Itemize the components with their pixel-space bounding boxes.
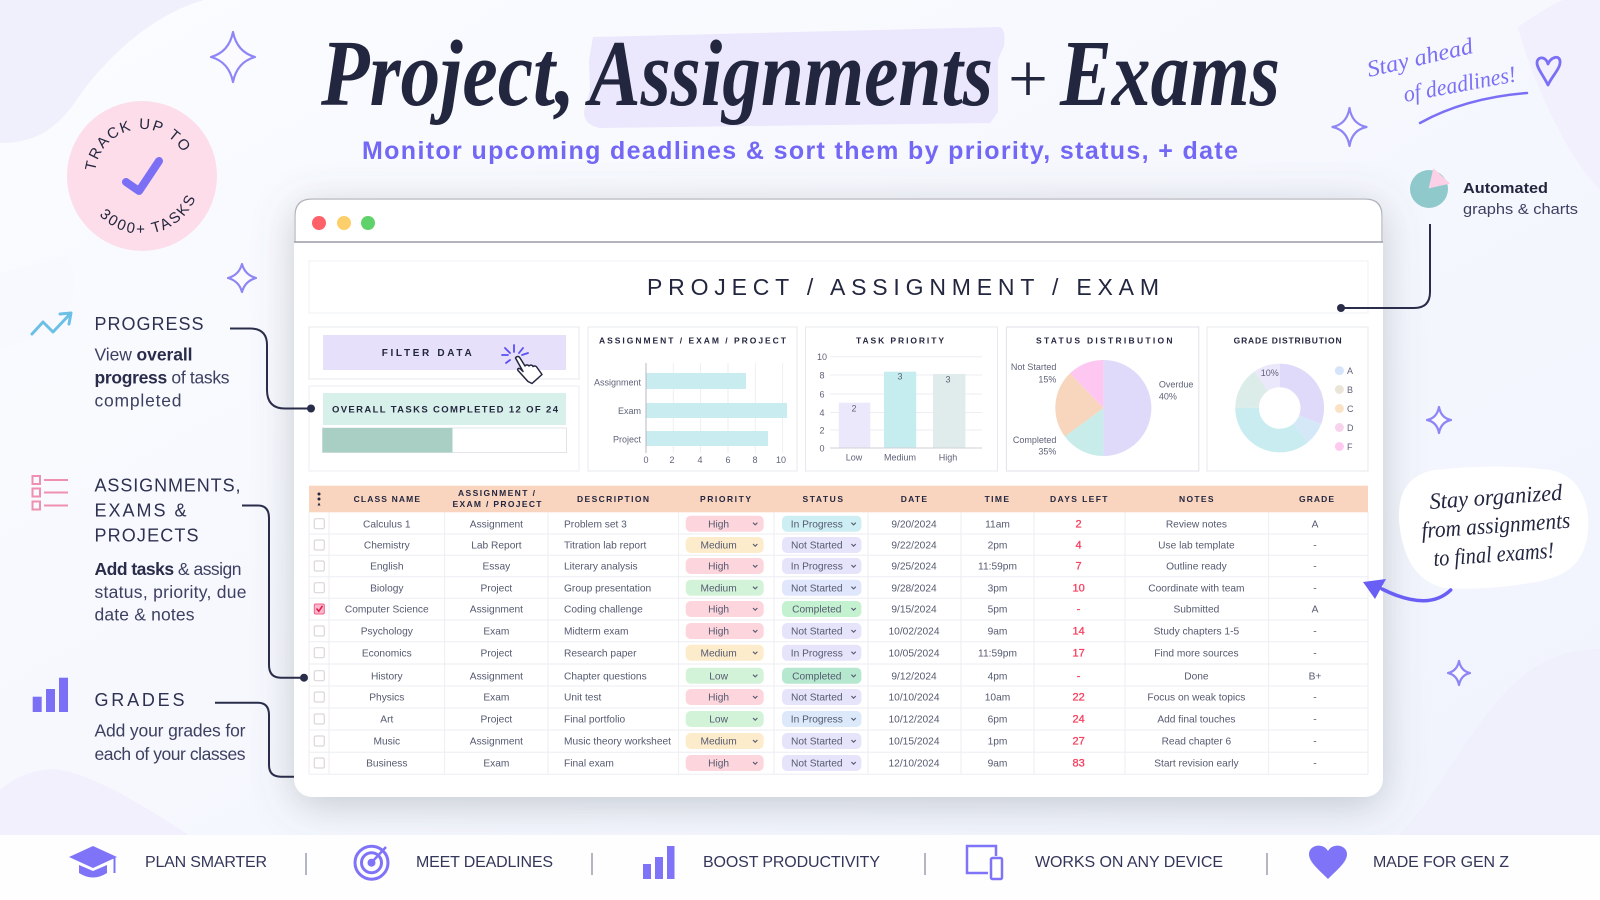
- table row: Calculus 1: 2: [1076, 518, 1082, 530]
- note: stay ahead of deadlines: Stay ahead: [1365, 33, 1476, 82]
- table row: Computer Science: Assignment: [470, 605, 523, 616]
- bar chart: assignment exam project: 2: [669, 455, 675, 465]
- table row: Economics: Economics: [362, 648, 412, 659]
- pie chart: status distribution: Not Started: [1011, 362, 1056, 372]
- table header: DATE: [901, 494, 927, 504]
- table row: Art: 6pm: [988, 715, 1007, 726]
- table row: Psychology: Exam: [483, 627, 509, 638]
- bar chart: task priority: 6: [819, 390, 825, 400]
- icon: bar chart: [33, 678, 68, 712]
- bar chart: assignment exam project: ASSIGNMENT / EXAM / PROJECT: [599, 336, 787, 346]
- chart legend: F: [1347, 442, 1353, 452]
- table row: Biology: [314, 580, 1317, 596]
- title: Assignments: [585, 22, 993, 126]
- note: stay ahead of deadlines: of deadlines!: [1401, 62, 1518, 107]
- table row: Chemistry: -: [1313, 541, 1317, 552]
- chart legend: B: [1347, 385, 1353, 395]
- table row: Computer Science: Coding challenge: [564, 605, 643, 616]
- panel: filter data: [309, 327, 579, 384]
- bar chart: assignment exam project: Assignment: [594, 378, 641, 388]
- table row: Biology: Not Started: [791, 583, 843, 594]
- table row: Physics: Not Started: [791, 693, 843, 704]
- callout: automated graphs: graphs & charts: [1463, 201, 1578, 218]
- table row: Physics: Physics: [369, 693, 404, 704]
- bar chart: assignment exam project: 0: [643, 455, 649, 465]
- table row: Calculus 1: Review notes: [1166, 519, 1227, 530]
- table row: Chemistry: Medium: [700, 541, 737, 552]
- table header: NOTES: [1179, 494, 1214, 504]
- table row: Economics: Research paper: [564, 648, 637, 659]
- table row: Economics: 11:59pm: [978, 648, 1017, 659]
- table row: Chemistry: 4: [1076, 540, 1082, 552]
- panel: progress: [32, 313, 230, 411]
- table row: Business: -: [1313, 759, 1317, 770]
- footer bar: MADE FOR GEN Z: [1373, 854, 1509, 871]
- table row: Biology: 3pm: [988, 583, 1007, 594]
- panel: assignments, exams and projects: status, priority, due: [94, 582, 246, 602]
- table row: Psychology: [314, 623, 1317, 639]
- table row: Psychology: -: [1313, 627, 1317, 638]
- table row: Business: High: [708, 759, 729, 770]
- badge: track up to 3000+ tasks: [67, 101, 217, 251]
- table row: Economics: In Progress: [791, 648, 843, 659]
- pie chart: status distribution: Overdue: [1159, 380, 1193, 390]
- progress bar: [322, 428, 566, 452]
- table row: Chemistry: Chemistry: [364, 541, 411, 552]
- table row: Computer Science: A: [1312, 605, 1319, 616]
- footer bar: PLAN SMARTER: [145, 854, 267, 871]
- bar chart: task priority: Low: [846, 452, 863, 462]
- donut chart: grade distribution: GRADE DISTRIBUTION: [1234, 336, 1342, 346]
- bar chart: assignment exam project: Project: [613, 434, 641, 444]
- table row: Biology: Biology: [370, 583, 404, 594]
- table row: Computer Science: Submitted: [1173, 605, 1220, 616]
- table row: English: Outline ready: [1166, 562, 1228, 573]
- table row: Computer Science: 9/15/2024: [891, 605, 937, 616]
- table row: Economics: [314, 645, 1317, 661]
- table header: DESCRIPTION: [577, 494, 649, 504]
- panel: progress: progress of tasks: [94, 367, 230, 387]
- bar chart: task priority: 4: [819, 408, 825, 418]
- icon: pie chart: [1410, 170, 1448, 208]
- table row: Psychology: 9am: [988, 627, 1007, 638]
- table row: Computer Science: -: [1077, 604, 1081, 616]
- table row: Music: Assignment: [470, 737, 523, 748]
- table row: Business: [314, 755, 1317, 771]
- table row: Calculus 1: A: [1312, 519, 1319, 530]
- callout: stay organized: from assignments: [1421, 508, 1571, 543]
- pie chart: status distribution: 35%: [1038, 446, 1056, 456]
- icon: checklist: [32, 476, 68, 510]
- table row: Economics: -: [1313, 648, 1317, 659]
- table row: Music: Medium: [700, 737, 737, 748]
- table row: Biology: Group presentation: [564, 583, 651, 594]
- table row: Chemistry: Lab Report: [471, 541, 522, 552]
- table row: History: 4pm: [988, 671, 1007, 682]
- table row: Business: Not Started: [791, 759, 843, 770]
- table row: Music: Music theory worksheet: [564, 737, 671, 748]
- table row: History: Chapter questions: [564, 671, 647, 682]
- pie chart: status distribution: Completed: [1013, 435, 1056, 445]
- table row: Music: Music: [373, 737, 400, 748]
- bar chart: task priority: 0: [819, 444, 825, 454]
- icon: target: [355, 846, 388, 879]
- table row: Business: Final exam: [564, 759, 614, 770]
- icon: check mark: [126, 161, 159, 191]
- table row: Psychology: Psychology: [361, 627, 414, 638]
- table row: Calculus 1: 11am: [985, 519, 1010, 530]
- badge: track up to 3000+ tasks: TRACK UP TO: [84, 118, 190, 169]
- bar chart: task priority: [806, 327, 998, 471]
- chart legend: C: [1347, 404, 1354, 414]
- callout: automated graphs: Automated: [1463, 180, 1548, 197]
- table header: TIME: [985, 494, 1009, 504]
- table row: Economics: Find more sources: [1154, 648, 1239, 659]
- table row: Business: 9am: [988, 759, 1007, 770]
- sheet title: [309, 261, 1368, 313]
- pie chart: status distribution: 15%: [1038, 374, 1056, 384]
- bar chart: assignment exam project: [588, 327, 797, 471]
- table row: English: In Progress: [791, 562, 843, 573]
- bar chart: task priority: TASK PRIORITY: [856, 336, 944, 346]
- panel: assignments, exams and projects: [32, 476, 246, 625]
- connector: grades: [215, 703, 294, 777]
- table row: Computer Science: [314, 601, 1319, 617]
- table row: Physics: Focus on weak topics: [1147, 693, 1245, 704]
- chart legend: A: [1347, 366, 1353, 376]
- title: Exams: [1059, 22, 1280, 126]
- icon: growth bars: [643, 846, 674, 879]
- bar chart: assignment exam project: 8: [752, 455, 758, 465]
- table row: Physics: Unit test: [564, 693, 602, 704]
- title highlight brush: [584, 27, 1004, 128]
- panel: grades: [33, 678, 246, 764]
- callout: stay organized: [1399, 467, 1588, 589]
- table row: Calculus 1: Assignment: [470, 519, 523, 530]
- table row: Biology: Medium: [700, 583, 737, 594]
- table row: Art: In Progress: [791, 715, 843, 726]
- table row: Chemistry: Use lab template: [1158, 541, 1235, 552]
- table row: Business: Business: [366, 759, 407, 770]
- table row: Calculus 1: High: [708, 519, 729, 530]
- table row: History: [314, 668, 1321, 684]
- table row: Biology: -: [1313, 583, 1317, 594]
- table row: Calculus 1: 9/20/2024: [891, 519, 937, 530]
- table row: English: High: [708, 562, 729, 573]
- table row: Biology: Project: [481, 583, 512, 594]
- table row: Music: 1pm: [988, 737, 1007, 748]
- table row: History: Assignment: [470, 671, 523, 682]
- table row: Music: Not Started: [791, 737, 843, 748]
- icon: sparkle right: [1427, 407, 1451, 433]
- table row: History: History: [371, 671, 404, 682]
- bar chart: task priority: 2: [819, 426, 825, 436]
- bar chart: task priority: 8: [819, 370, 825, 380]
- panel: overall tasks progress: [309, 386, 579, 471]
- title: [320, 22, 1280, 128]
- connector: automated graphs: [1337, 224, 1430, 312]
- table row: Physics: 10am: [985, 693, 1010, 704]
- table row: Physics: 10/10/2024: [888, 693, 940, 704]
- icon: graduation cap: [69, 846, 117, 878]
- table row: Business: 12/10/2024: [888, 759, 940, 770]
- table row: English: English: [370, 562, 404, 573]
- panel: assignments, exams and projects: EXAMS &: [94, 501, 186, 521]
- table row: Calculus 1: [314, 516, 1319, 532]
- panel: grades: Add your grades for: [94, 721, 246, 741]
- table header: STATUS: [802, 494, 843, 504]
- footer bar: WORKS ON ANY DEVICE: [1035, 854, 1223, 871]
- table row: Art: Add final touches: [1157, 715, 1235, 726]
- table row: Music: 27: [1072, 736, 1085, 748]
- table header: PRIORITY: [700, 494, 751, 504]
- icon: sparkle top right: [1332, 108, 1366, 146]
- table row: Economics: 17: [1072, 647, 1085, 659]
- table row: Business: Start revision early: [1154, 759, 1239, 770]
- table row: Chemistry: [314, 537, 1317, 553]
- table row: Computer Science: High: [708, 605, 729, 616]
- panel: overall tasks progress: OVERALL TASKS COMPLETED 12 OF 24: [332, 404, 559, 416]
- table row: Biology: Coordinate with team: [1148, 583, 1245, 594]
- table row: Music: Read chapter 6: [1162, 737, 1232, 748]
- pie chart: status distribution: STATUS DISTRIBUTION: [1036, 336, 1172, 346]
- connector: assignments: [242, 506, 308, 682]
- table row: English: 7: [1076, 561, 1082, 573]
- table header: CLASS NAME: [354, 494, 420, 504]
- bar chart: assignment exam project: Exam: [618, 406, 641, 416]
- table header: [309, 486, 1368, 512]
- table row: Art: Art: [380, 715, 393, 726]
- table row: Calculus 1: In Progress: [791, 519, 843, 530]
- title: Project,: [320, 22, 575, 126]
- bar chart: task priority: 3: [897, 372, 903, 382]
- bar chart: assignment exam project: 4: [697, 455, 703, 465]
- table row: Psychology: 10/02/2024: [888, 627, 940, 638]
- icon: heart outline: [1537, 57, 1560, 85]
- bar chart: task priority: High: [939, 452, 957, 462]
- table row: Physics: [314, 689, 1317, 705]
- table row: Psychology: Study chapters 1-5: [1154, 627, 1239, 638]
- bar chart: task priority: 2: [851, 404, 857, 414]
- table row: Psychology: Midterm exam: [564, 627, 629, 638]
- bar chart: assignment exam project: 6: [725, 455, 731, 465]
- table row: Computer Science: Completed: [792, 605, 842, 616]
- table row: Physics: High: [708, 693, 729, 704]
- table row: English: Essay: [483, 562, 511, 573]
- title: +: [1008, 41, 1048, 118]
- sheet title: PROJECT / ASSIGNMENT / EXAM: [647, 274, 1159, 300]
- table row: Calculus 1: Calculus 1: [363, 519, 411, 530]
- chart legend: [1335, 366, 1354, 452]
- table row: Psychology: 14: [1072, 626, 1085, 638]
- table row: Chemistry: Titration lab report: [564, 541, 646, 552]
- icon: sparkle lower right: [1448, 661, 1470, 685]
- table row: Chemistry: 9/22/2024: [891, 541, 937, 552]
- table row: History: Done: [1184, 671, 1209, 682]
- icon: devices: [967, 846, 1002, 879]
- table row: Music: -: [1313, 737, 1317, 748]
- table row: History: Completed: [792, 671, 842, 682]
- table row: Physics: Exam: [483, 693, 509, 704]
- panel: assignments, exams and projects: ASSIGNMENTS,: [94, 476, 240, 496]
- table row: History: 9/12/2024: [891, 671, 937, 682]
- table row: Economics: Project: [481, 648, 512, 659]
- donut chart: grade distribution: [1207, 327, 1368, 471]
- table row: History: Low: [709, 671, 729, 682]
- table row: Business: 83: [1072, 758, 1085, 770]
- connector: progress: [230, 328, 315, 412]
- footer bar: MEET DEADLINES: [416, 854, 553, 871]
- panel: grades: GRADES: [94, 690, 184, 710]
- table row: Art: Project: [481, 715, 512, 726]
- icon: trend arrow: [32, 313, 71, 334]
- callout: stay organized: to final exams!: [1433, 538, 1555, 571]
- table row: Chemistry: Not Started: [791, 541, 843, 552]
- table: [309, 486, 1368, 774]
- badge: track up to 3000+ tasks: 3000+ TASKS: [100, 196, 194, 233]
- panel: progress: View overall: [94, 345, 192, 365]
- chart legend: D: [1347, 423, 1354, 433]
- bar chart: assignment exam project: 10: [776, 455, 786, 465]
- subtitle: Monitor upcoming deadlines & sort them by priority, status, + date: [362, 137, 1238, 165]
- table header: EXAM / PROJECT: [452, 499, 542, 509]
- footer bar: [0, 835, 1600, 900]
- window control dots: [312, 216, 375, 230]
- table row: Computer Science: Computer Science: [345, 605, 429, 616]
- icon: heart: [1309, 846, 1347, 879]
- callout: stay organized: Stay organized: [1429, 480, 1564, 514]
- panel: assignments, exams and projects: date & notes: [94, 605, 195, 625]
- table row: English: Literary analysis: [564, 562, 638, 573]
- bar chart: task priority: Medium: [884, 452, 916, 462]
- panel: progress: PROGRESS: [94, 314, 204, 334]
- table row: Physics: 22: [1072, 692, 1085, 704]
- table row: English: [314, 558, 1317, 574]
- icon: sparkle top left: [211, 32, 255, 82]
- bar chart: task priority: 10: [817, 352, 827, 362]
- table row: Business: Exam: [483, 759, 509, 770]
- arrow: callout to table: [1363, 579, 1451, 601]
- table row: English: 9/25/2024: [891, 562, 937, 573]
- table row: Art: Low: [709, 715, 729, 726]
- panel: assignments, exams and projects: Add tasks & assign: [94, 559, 242, 579]
- table row: Art: -: [1313, 715, 1317, 726]
- table row: Physics: -: [1313, 693, 1317, 704]
- table row: Computer Science: 5pm: [988, 605, 1007, 616]
- footer bar: BOOST PRODUCTIVITY: [703, 854, 880, 871]
- note: stay ahead of deadlines: [1365, 33, 1560, 123]
- icon: hand cursor: [516, 356, 542, 384]
- table header: DAYS LEFT: [1050, 494, 1108, 504]
- table row: English: -: [1313, 562, 1317, 573]
- table row: Calculus 1: Problem set 3: [564, 519, 627, 530]
- callout: automated graphs: [1410, 170, 1578, 218]
- panel: filter data: FILTER DATA: [382, 348, 472, 359]
- table row: English: 11:59pm: [978, 562, 1017, 573]
- bar chart: task priority: 3: [945, 374, 951, 384]
- panel: progress: completed: [94, 391, 182, 411]
- table row: Music: 10/15/2024: [888, 737, 940, 748]
- underline stroke: [1420, 93, 1527, 123]
- icon: sparkle left: [228, 264, 256, 292]
- table row: Economics: Medium: [700, 648, 737, 659]
- table row: Music: [314, 733, 1317, 749]
- app window: [294, 198, 1383, 797]
- table row: Art: 10/12/2024: [888, 715, 940, 726]
- table row: Biology: 9/28/2024: [891, 583, 937, 594]
- table row: Psychology: High: [708, 627, 729, 638]
- table header: ASSIGNMENT /: [458, 488, 536, 498]
- panel: assignments, exams and projects: PROJECTS: [94, 526, 198, 546]
- table row: Art: [314, 711, 1317, 727]
- table row: Economics: 10/05/2024: [888, 648, 940, 659]
- table row: Art: Final portfolio: [564, 715, 625, 726]
- panel: grades: each of your classes: [94, 744, 246, 764]
- table header: GRADE: [1299, 494, 1334, 504]
- table row: History: B+: [1309, 671, 1321, 682]
- table row: History: -: [1077, 670, 1081, 682]
- pie chart: status distribution: 40%: [1159, 392, 1177, 402]
- table row: Chemistry: 2pm: [988, 541, 1007, 552]
- pie chart: status distribution: [1006, 327, 1199, 471]
- table row: Psychology: Not Started: [791, 627, 843, 638]
- table row: Art: 24: [1072, 714, 1085, 726]
- donut chart: grade distribution: 10%: [1261, 368, 1279, 378]
- table row: Biology: 10: [1072, 582, 1085, 594]
- icon: click rays: [502, 345, 528, 363]
